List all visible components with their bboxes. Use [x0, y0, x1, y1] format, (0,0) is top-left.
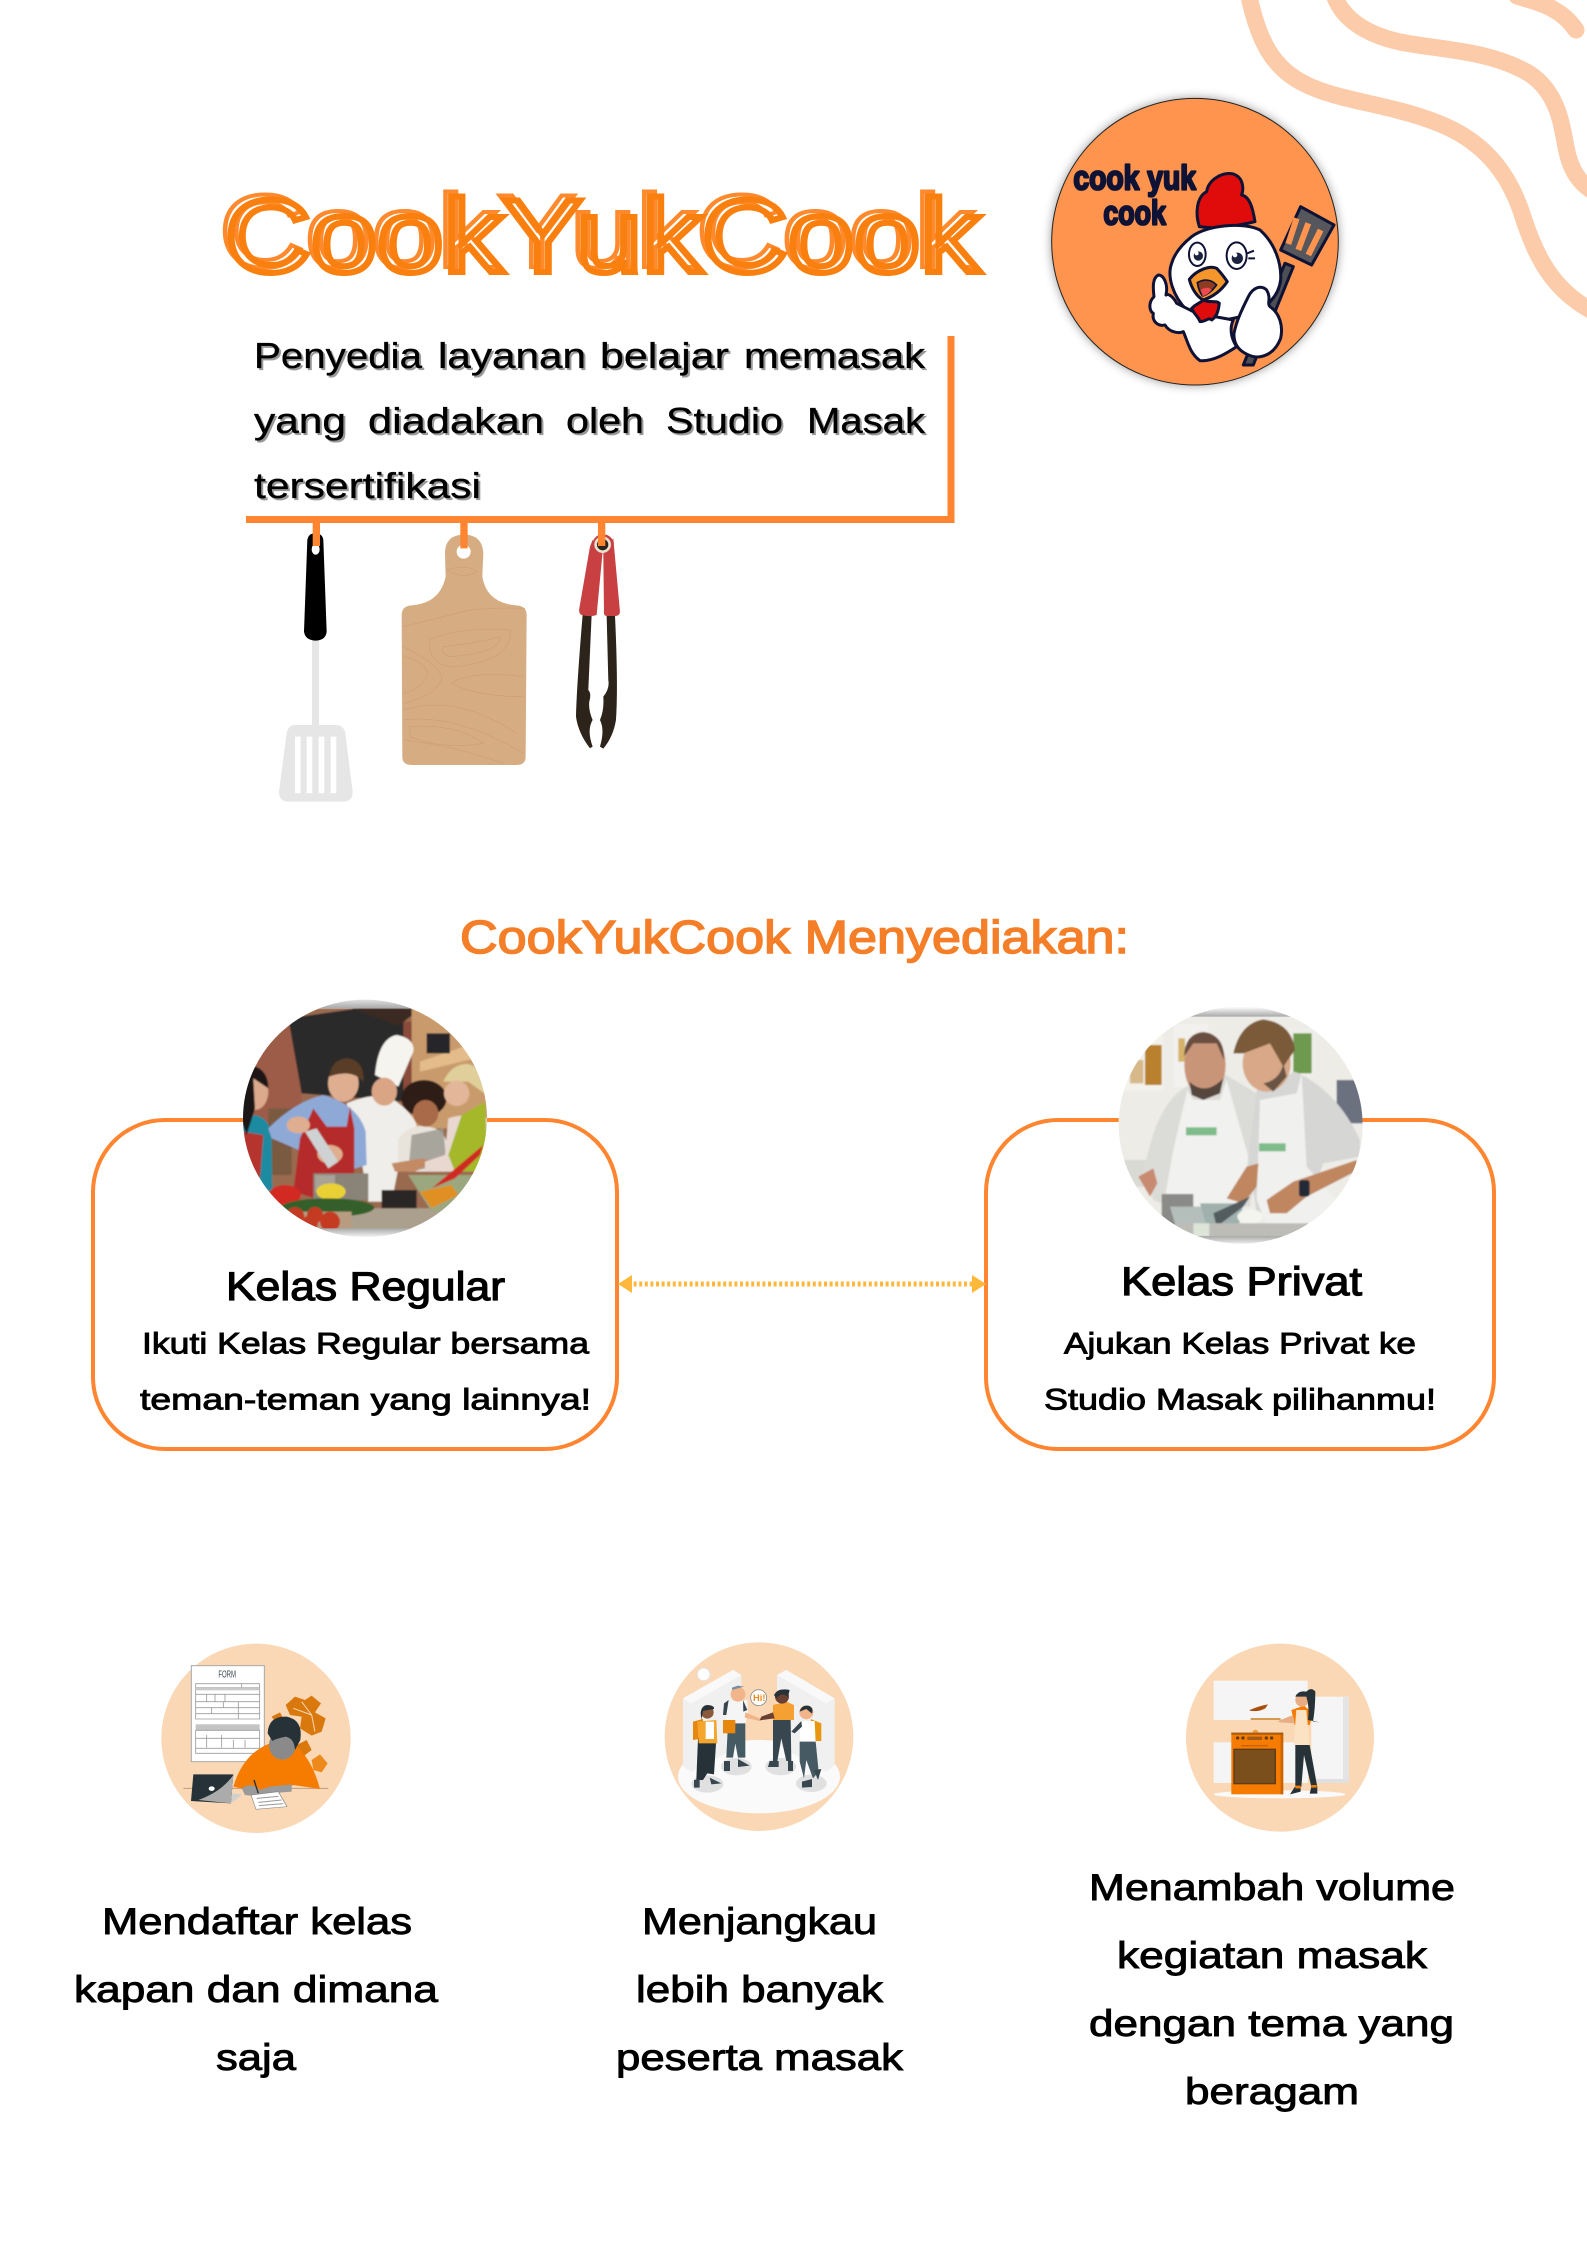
- benefit text: Menambah volume: [1089, 1867, 1455, 2112]
- speech bubble: [751, 1690, 767, 1706]
- arrow: double-headed dotted: [618, 1275, 986, 1293]
- card heading: Kelas Privat: [1121, 1260, 1362, 1304]
- man: [268, 1095, 367, 1172]
- benefit text: Mendaftar kelas: Mendaftar kelas: [102, 1901, 412, 1942]
- icon: spatula: [279, 533, 353, 802]
- left woman: [242, 1115, 272, 1192]
- description text: Masak: [807, 400, 926, 441]
- benefit text: Menjangkau: Menjangkau: [642, 1901, 877, 1942]
- card heading: Kelas Regular: [226, 1265, 505, 1309]
- icon: students meeting: [665, 1642, 853, 1831]
- title: CookYukCook: CookYukCook: [225, 179, 981, 295]
- table line: [183, 1787, 328, 1790]
- description text: layanan: [438, 335, 586, 376]
- chef: [347, 1096, 417, 1202]
- card text: teman-teman yang lainnya!: [140, 1384, 591, 1416]
- shadows: [691, 1758, 827, 1793]
- description text: Penyedia: [254, 335, 423, 376]
- card text: Ikuti Kelas Regular bersama: [142, 1328, 589, 1360]
- benefit text: Menambah volume: kegiatan masak: [1117, 1935, 1428, 1976]
- panel: Kelas Privat: [986, 1006, 1494, 1449]
- benefit text: Menambah volume: Menambah volume: [1089, 1867, 1455, 1908]
- woman: [1295, 1745, 1317, 1787]
- speech bubble: Hi!: [753, 1693, 765, 1703]
- cabinets: [1214, 1681, 1308, 1720]
- person 2: [723, 1686, 761, 1771]
- plants: [272, 1696, 328, 1772]
- photo: group cooking class: [235, 995, 495, 1238]
- benefit text: Menjangkau: lebih banyak: [636, 1969, 884, 2010]
- benefit text: Menambah volume: beragam: [1185, 2071, 1359, 2112]
- logo text: [1073, 159, 1197, 232]
- card text: Ajukan Kelas Privat ke: [1064, 1328, 1416, 1360]
- cooking school logos: [1186, 1127, 1217, 1135]
- person 3: [760, 1689, 794, 1771]
- card text: [1044, 1328, 1436, 1416]
- benefit text: Menjangkau: peserta masak: [616, 2037, 904, 2078]
- blonde woman: [425, 1115, 488, 1172]
- icon: filling in a form: FORM: [218, 1670, 236, 1681]
- panel: Kelas Regular: [93, 995, 617, 1449]
- flying pancake: [1250, 1704, 1268, 1711]
- utensils: [1162, 1194, 1193, 1225]
- benefit text: Mendaftar kelas: [74, 1901, 438, 2078]
- icon: woman cooking at stove: [1186, 1644, 1374, 1832]
- laptop: [191, 1774, 233, 1803]
- title: CookYukCook: CookYukCook: [219, 174, 975, 290]
- benefit text: Mendaftar kelas: saja: [216, 2037, 296, 2078]
- person: [233, 1743, 320, 1792]
- logo text: cook: [1103, 194, 1167, 232]
- pot and vegetables: [313, 1173, 368, 1200]
- person 4: [791, 1705, 821, 1788]
- pan: [1251, 1716, 1281, 1722]
- afro woman: [398, 1126, 448, 1172]
- paper: [251, 1792, 287, 1809]
- right chef: [1248, 1072, 1360, 1213]
- form sheet: [191, 1666, 264, 1762]
- description text: tersertifikasi: [254, 465, 481, 506]
- description text: belajar: [600, 335, 729, 376]
- description text: Studio: [666, 400, 783, 441]
- benefit text: Menambah volume: dengan tema yang: [1089, 2003, 1454, 2044]
- icon: filling in a form: [161, 1644, 351, 1833]
- icon: cutting board: [402, 534, 527, 765]
- description text: memasak: [744, 335, 926, 376]
- decorative waves top right: [1248, 0, 1587, 312]
- card text: Studio Masak pilihanmu!: [1044, 1384, 1436, 1416]
- person 1: [693, 1705, 721, 1788]
- description text: yang: [254, 400, 346, 441]
- photo: two chefs: [1110, 1006, 1370, 1246]
- benefit text: Menjangkau: [616, 1901, 904, 2078]
- heading: CookYukCook Menyediakan: CookYukCook Menyediakan:: [460, 911, 1129, 963]
- logo text: cook yuk: [1073, 159, 1197, 197]
- hooks: [313, 520, 605, 548]
- description text: [254, 335, 926, 506]
- left chef: [1143, 1073, 1257, 1207]
- kitchen tools hanging: [279, 520, 620, 802]
- icon: chicken mascot: [1150, 174, 1334, 365]
- floor: [678, 1740, 840, 1813]
- benefit text: Mendaftar kelas: kapan dan dimana: [74, 1969, 438, 2010]
- icon: tongs: [576, 534, 620, 749]
- stove: [1231, 1733, 1283, 1794]
- logo: cook yuk cook chicken: [1052, 98, 1338, 385]
- description text: oleh: [566, 400, 644, 441]
- description text: diadakan: [368, 400, 544, 441]
- hanging rail: [246, 336, 951, 520]
- lockers: [683, 1670, 741, 1772]
- card text: [140, 1328, 591, 1416]
